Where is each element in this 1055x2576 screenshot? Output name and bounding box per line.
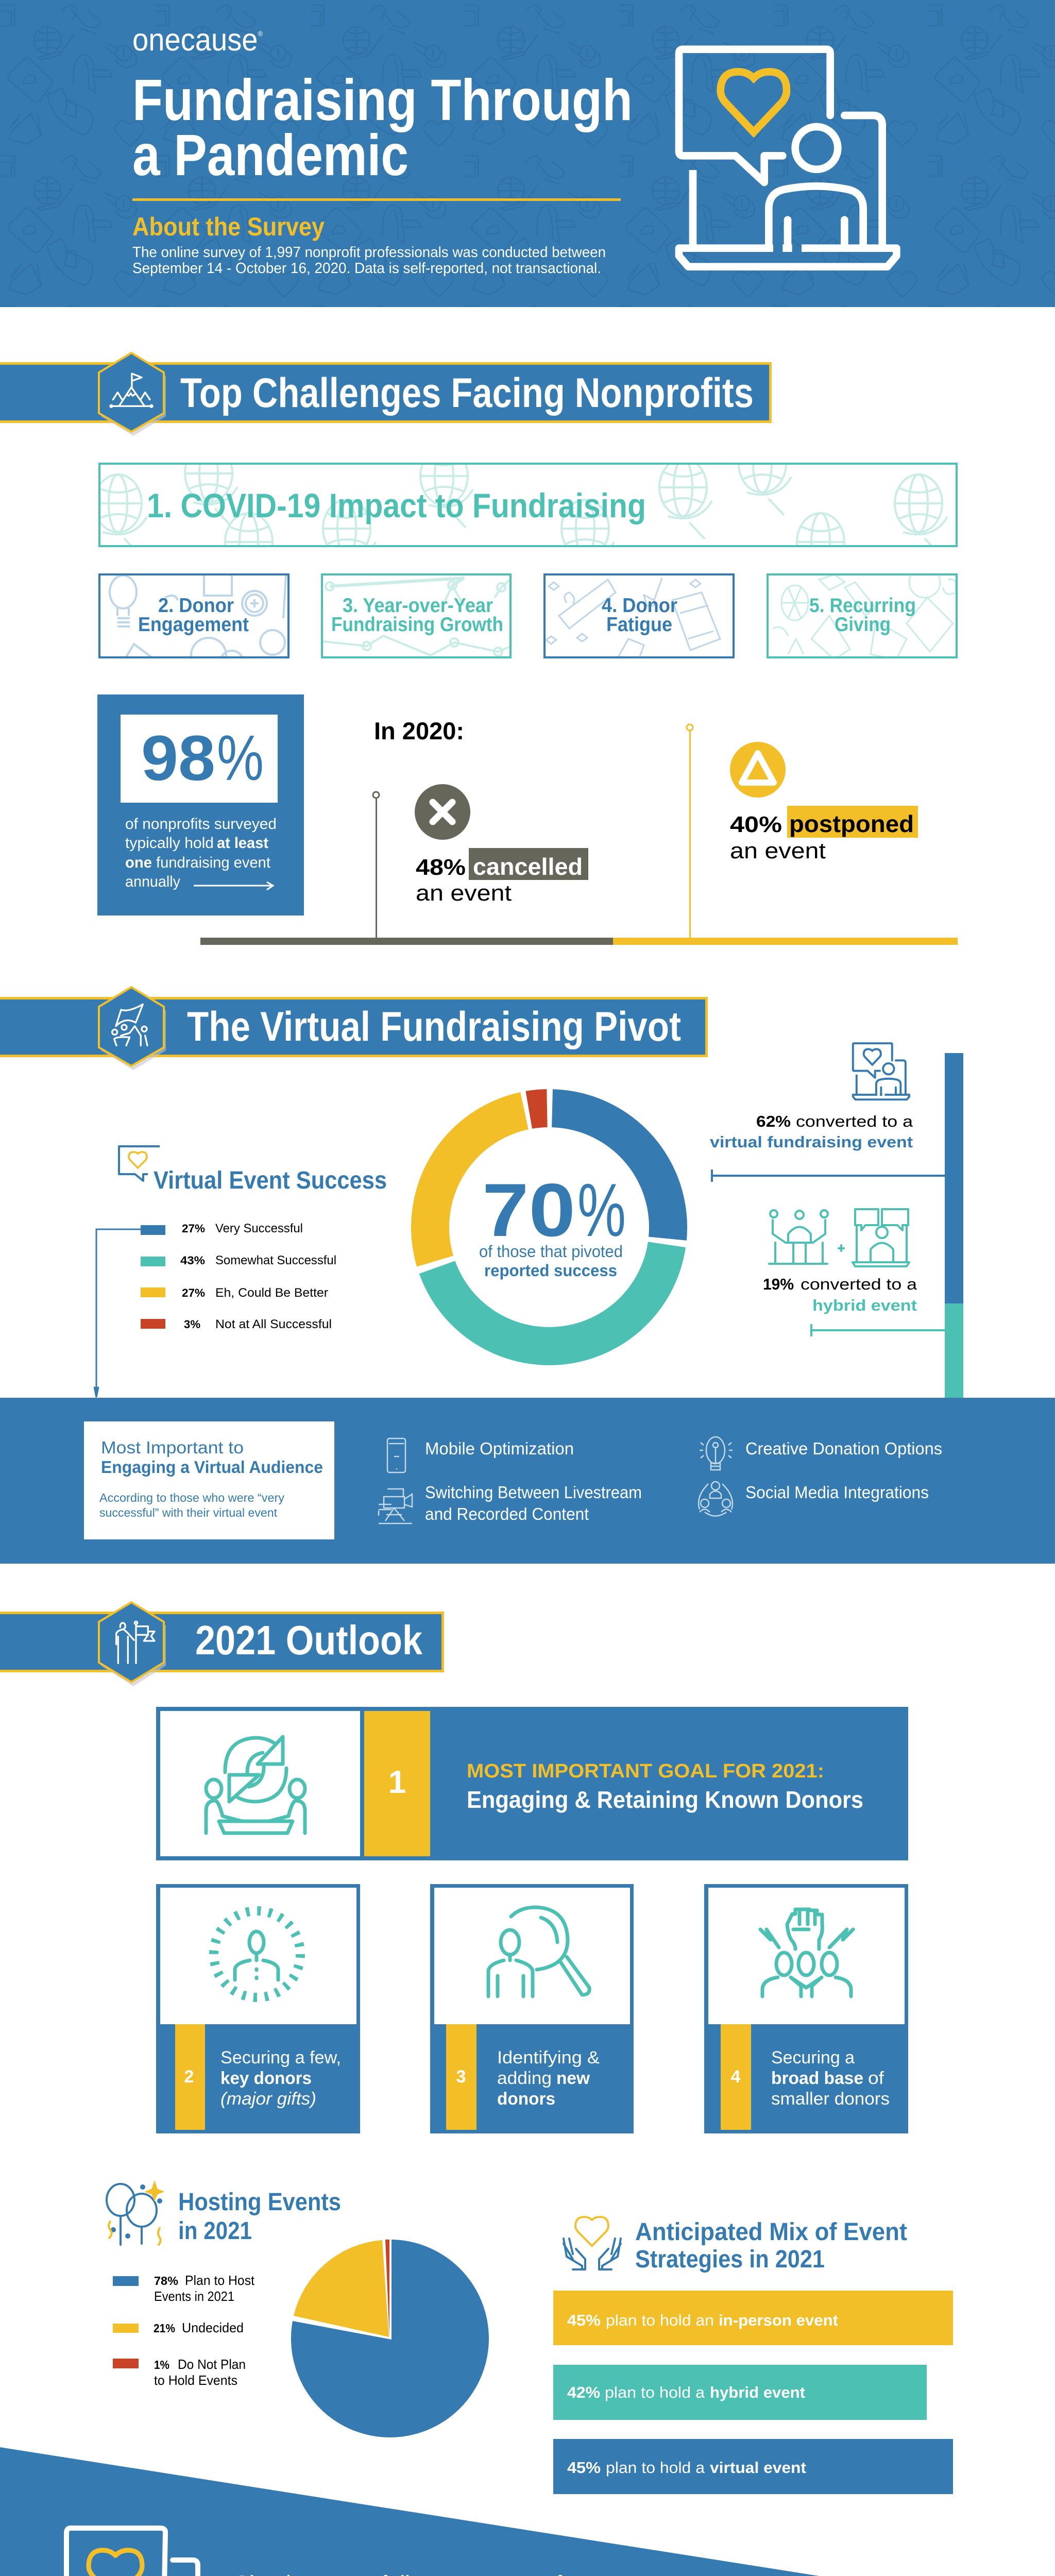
legend: virtual event success [94, 1146, 387, 1397]
panel: goal 2 [156, 1884, 360, 2133]
item: switching: and Recorded Content [425, 1504, 589, 1523]
text: key donors [220, 2069, 312, 2088]
legend row: 43% [180, 1254, 205, 1267]
heading text: 2021 Outlook [195, 1617, 422, 1663]
icon: hands with heart [564, 2217, 621, 2269]
legend row [113, 2357, 246, 2388]
panel: in 2020 timeline [200, 717, 958, 945]
card: engaging a virtual audience: Most Important to [101, 1438, 244, 1457]
heading [178, 2189, 341, 2245]
card: engaging a virtual audience [84, 1421, 334, 1539]
legend row [141, 1222, 303, 1235]
callout: 19 percent: hybrid event [812, 1296, 917, 1314]
text [602, 595, 677, 636]
legend row: Somewhat Successful [215, 1253, 336, 1267]
item: switching: Switching Between Livestream [425, 1483, 642, 1502]
text: new [556, 2069, 590, 2088]
panel: anticipated mix [553, 2217, 953, 2494]
text: Giving [835, 614, 891, 636]
number: 3 [456, 2067, 466, 2087]
text: Securing a few, [220, 2048, 341, 2067]
text: of [868, 2069, 884, 2088]
icon: x in circle [415, 784, 470, 840]
icon: camera [379, 1489, 412, 1523]
bar: hybrid: hybrid event [710, 2383, 805, 2401]
bar: virtual: 45% [567, 2459, 601, 2477]
heading: Anticipated Mix of Event [635, 2218, 907, 2246]
legend row [141, 1286, 328, 1300]
stat: postponed: postponed [789, 810, 914, 837]
panel: challenge 2 donor engagement [98, 573, 290, 658]
icon: chat bubbles with heart [66, 2528, 198, 2576]
title [132, 67, 633, 188]
number: 1 [388, 1765, 406, 1800]
callout: 62 percent [710, 1112, 945, 1182]
text: donors [497, 2089, 555, 2109]
bar: virtual: virtual event [710, 2459, 806, 2477]
arrow: connector to band [94, 1229, 141, 1397]
text: 5. Recurring [809, 595, 916, 617]
icon: social [699, 1482, 733, 1516]
bar: in-person: 45% [567, 2311, 601, 2329]
panel: footer call to action [66, 2528, 982, 2576]
donut center text: 70 [482, 1168, 575, 1252]
text [220, 2048, 341, 2109]
heading text: Top Challenges Facing Nonprofits [180, 370, 754, 416]
donut chart: virtual event success [411, 1089, 687, 1365]
icon: bulb [700, 1437, 733, 1470]
card: engaging a virtual audience: Engaging a Virtual Audience [101, 1458, 323, 1477]
legend row: 78% [154, 2274, 178, 2287]
number: 2 [184, 2067, 194, 2087]
icon: mobile [387, 1438, 405, 1472]
heading: about the survey: About the Survey [132, 212, 325, 241]
heading [635, 2218, 907, 2273]
text: adding [497, 2069, 552, 2088]
legend row: Not at All Successful [215, 1317, 332, 1331]
text: 4. Donor [602, 595, 677, 617]
donut center text: reported success [484, 1261, 617, 1280]
text [497, 2048, 600, 2109]
stat description: fundraising event [156, 854, 271, 871]
icon: bubble heart [119, 1146, 160, 1181]
section heading: virtual pivot [0, 987, 708, 1070]
heading: Hosting Events [178, 2189, 341, 2216]
stat number: % [217, 723, 264, 794]
icon: crowd with flag [112, 1004, 147, 1045]
text: Securing a [771, 2048, 855, 2067]
stat number: 98 [141, 723, 215, 794]
text [809, 595, 916, 636]
bar: in-person: plan to hold an [606, 2311, 714, 2329]
right bar chart: conversion [710, 1043, 963, 1399]
bar: hybrid [553, 2365, 927, 2420]
panel: goal 1: Engaging & Retaining Known Donors [467, 1786, 863, 1813]
stat: postponed: 40% [730, 812, 782, 837]
callout: 62 percent: virtual fundraising event [710, 1133, 913, 1151]
text: smaller donors [771, 2089, 890, 2109]
legend row: 27% [182, 1286, 205, 1299]
text: broad base [771, 2069, 863, 2088]
icon: balloons [107, 2183, 162, 2245]
legend row: 21% [154, 2321, 175, 2335]
icon: mountain flag [110, 374, 152, 407]
heading: Virtual Event Success [154, 1167, 387, 1194]
legend row: Plan to Host [185, 2273, 255, 2288]
stat number [141, 723, 264, 794]
stat: postponed: an event [730, 838, 826, 863]
stat description: at least [217, 835, 268, 852]
bar: hybrid: 42% [567, 2383, 600, 2401]
text: 1. COVID-19 Impact to Fundraising [147, 486, 646, 524]
donut center text: of those that pivoted [479, 1242, 623, 1261]
panel: challenge 3 year over year [322, 574, 512, 657]
stat: cancelled: cancelled [473, 853, 583, 880]
callout: 19 percent [763, 1275, 945, 1336]
text [331, 595, 503, 636]
bar: in-person: in-person event [719, 2311, 838, 2329]
panel: most important band [0, 1398, 1055, 1564]
stat: postponed [730, 806, 918, 863]
stat: cancelled: 48% [416, 855, 466, 880]
stat description: of nonprofits surveyed [125, 816, 277, 833]
panel: goal 4 [704, 1884, 908, 2133]
item: social media: Social Media Integrations [745, 1483, 929, 1502]
title: a Pandemic [132, 123, 409, 188]
icon: retain donors [206, 1737, 305, 1833]
section heading: 2021 outlook [0, 1602, 444, 1686]
text: Engagement [138, 614, 249, 636]
text: 2. Donor [158, 595, 234, 617]
legend row [113, 2320, 244, 2335]
icon: person at laptop with heart bubble [679, 49, 896, 267]
panel: goal 1 [156, 1707, 908, 1860]
text: Identifying & [497, 2048, 600, 2067]
donut center text: % [577, 1168, 626, 1252]
number: 4 [731, 2067, 741, 2087]
callout: 62 percent: converted to a [796, 1112, 913, 1130]
title: Fundraising Through [132, 67, 633, 132]
text: survey description: The online survey of 1,997 nonprofit professionals was conducted between [132, 244, 606, 261]
item: mobile optimization: Mobile Optimization [425, 1439, 574, 1458]
text: 3. Year-over-Year [343, 595, 493, 617]
panel: 98 percent stat [97, 694, 304, 916]
heading: in 2021 [178, 2217, 252, 2245]
panel: header [0, 0, 1055, 307]
callout: 19 percent: converted to a [801, 1275, 917, 1293]
text [138, 595, 249, 636]
donut center text [479, 1168, 626, 1280]
item: switching [425, 1483, 642, 1523]
legend row [141, 1253, 336, 1267]
heading: Strategies in 2021 [635, 2246, 825, 2273]
callout: 19 percent: 19% [763, 1275, 794, 1293]
stat description: one [125, 854, 152, 871]
card: engaging a virtual audience: According to those who were “very [99, 1491, 285, 1504]
text: Fundraising Growth [331, 614, 503, 636]
logo: onecause: ® [258, 29, 263, 38]
stat: cancelled [416, 848, 588, 906]
legend row: Eh, Could Be Better [215, 1286, 328, 1300]
bar: hybrid: plan to hold a [605, 2383, 705, 2401]
footer background [0, 2447, 1055, 2576]
text: (major gifts) [220, 2089, 316, 2109]
legend row: Events in 2021 [154, 2289, 234, 2304]
icon: crowd with fist [760, 1909, 853, 1996]
stat description [125, 816, 277, 890]
bar: virtual [553, 2439, 953, 2494]
goal text: MOST IMPORTANT GOAL FOR 2021: [467, 1760, 824, 1782]
panel: challenge 5 recurring giving [768, 567, 957, 659]
callout: 62 percent: 62% [756, 1112, 791, 1130]
icon: magnifier person [488, 1907, 589, 1996]
pie chart [291, 2240, 489, 2437]
heading text: The Virtual Fundraising Pivot [187, 1004, 681, 1050]
icon: key donor [214, 1911, 300, 1997]
section heading: top challenges [0, 353, 772, 436]
legend row: 3% [184, 1318, 200, 1331]
arrow [194, 882, 273, 890]
legend row [113, 2273, 255, 2304]
legend row [141, 1317, 332, 1331]
panel: challenge 1 covid [98, 463, 958, 547]
icon: person with flag [116, 1621, 155, 1663]
icon: triangle in circle [730, 742, 786, 798]
legend row: Do Not Plan [178, 2357, 246, 2372]
legend row: Very Successful [215, 1222, 303, 1235]
legend row: to Hold Events [154, 2372, 237, 2388]
text [771, 2048, 890, 2109]
legend row: 1% [154, 2358, 169, 2371]
panel: hosting events [107, 2183, 489, 2437]
panel: goal 3 [430, 1884, 634, 2133]
stat description: annually [125, 873, 180, 890]
card: engaging a virtual audience: successful” with their virtual event [99, 1506, 278, 1519]
panel: challenge 4 donor fatigue [544, 574, 734, 659]
text: survey description [132, 244, 606, 277]
stat description: typically hold [125, 835, 214, 852]
text: Fatigue [606, 614, 672, 636]
stat: cancelled: an event [416, 880, 512, 906]
bar: in-person [553, 2291, 953, 2345]
legend row: Undecided [182, 2320, 244, 2335]
icon: virtual event [853, 1043, 909, 1099]
text: survey description: September 14 - October 16, 2020. Data is self-reported, not transactional. [132, 260, 601, 277]
bar: virtual: plan to hold a [606, 2459, 705, 2477]
logo: onecause: onecause [132, 22, 269, 57]
item: creative donation: Creative Donation Options [745, 1439, 942, 1458]
icon: hybrid event [769, 1209, 909, 1266]
legend row: 27% [182, 1222, 205, 1235]
heading: In 2020: [374, 717, 464, 744]
